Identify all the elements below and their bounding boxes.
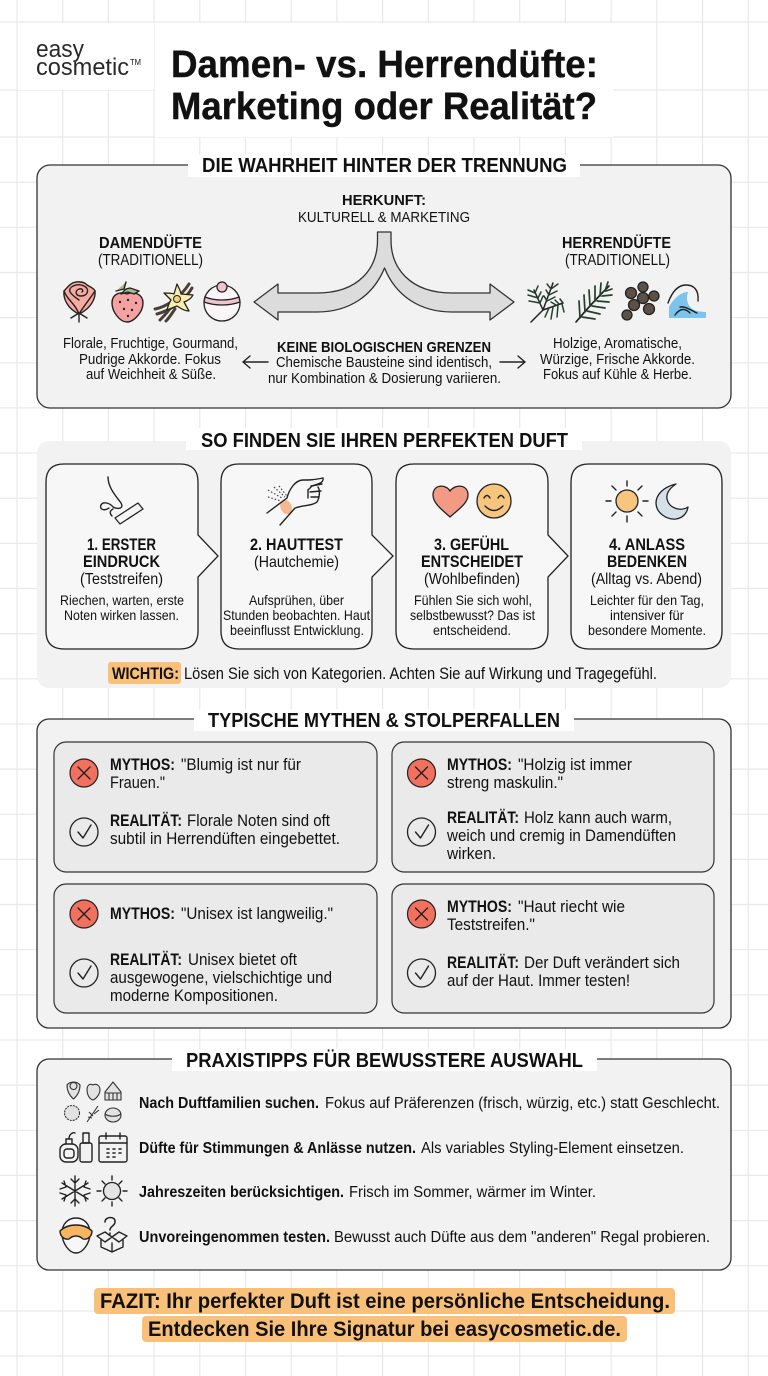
- text: myth 3: ausgewogene, vielschichtige und: [110, 969, 332, 987]
- text: myth 1: REALITÄT:: [110, 812, 182, 830]
- text: step 4: BEDENKEN: [607, 553, 687, 571]
- text: step 2: (Hautchemie): [254, 554, 339, 571]
- text: Damendüfte description: Pudrige Akkorde. Fokus: [79, 351, 221, 368]
- text: step 3: [410, 535, 535, 638]
- panel: Praxistipps: [37, 1049, 731, 1270]
- text: step 4: besondere Momente.: [588, 622, 706, 638]
- heading: Herrendüfte: HERRENDÜFTE: [562, 235, 671, 252]
- arrow: small right: [500, 356, 525, 368]
- icon: check: [70, 959, 98, 987]
- text: myth 1: Florale Noten sind oft: [187, 812, 330, 830]
- icon: bottles and calendar: [60, 1133, 127, 1162]
- text: step 1: (Teststreifen): [80, 571, 163, 588]
- icon: moon: [656, 484, 688, 519]
- text: Herrendüfte description: Holzige, Aromatische,: [553, 335, 682, 352]
- text: myth 2: REALITÄT:: [447, 809, 519, 827]
- text: myth 4: REALITÄT:: [447, 954, 519, 972]
- text: Herrendüfte description: Fokus auf Kühle & Herbe.: [543, 366, 692, 383]
- icon: rosemary sprig: [576, 282, 612, 322]
- text: step 3: (Wohlbefinden): [424, 571, 520, 588]
- text: step 3: 3. GEFÜHL: [434, 535, 509, 554]
- text: myth 3: REALITÄT:: [110, 951, 182, 969]
- text: tip 3: Frisch im Sommer, wärmer im Winter.: [349, 1184, 596, 1201]
- text: myth 2: MYTHOS:: [447, 756, 512, 774]
- text: step 4: (Alltag vs. Abend): [591, 571, 702, 588]
- title: Marketing oder Realität?: [171, 86, 597, 128]
- text: step 1: Noten wirken lassen.: [64, 607, 179, 623]
- heading: die Wahrheit: DIE WAHRHEIT HINTER DER TRENNUNG: [202, 154, 567, 177]
- text: myth 1: subtil in Herrendüften eingebettet.: [110, 830, 340, 848]
- icon: wrist with spray: [267, 478, 323, 525]
- text: tip 3: [139, 1184, 596, 1201]
- text: Damendüfte description: auf Weichheit & Süße.: [86, 366, 216, 383]
- icon: check: [408, 959, 436, 987]
- panel: die Wahrheit hinter der Trennung: [37, 154, 731, 408]
- text: keine biologischen Grenzen: [268, 339, 501, 387]
- logo: easy cosmetic: easy: [36, 36, 84, 63]
- callout: wichtig: WICHTIG:: [112, 665, 179, 683]
- text: keine biologischen Grenzen: nur Kombination & Dosierung variieren.: [268, 370, 501, 387]
- text: keine biologischen Grenzen: Chemische Bausteine sind identisch,: [276, 354, 492, 371]
- text: myth 1: "Blumig ist nur für: [181, 756, 301, 774]
- text: step 2: beeinflusst Entwicklung.: [230, 622, 364, 638]
- icon: snowflake: [60, 1176, 90, 1206]
- icon: sun: [606, 481, 648, 522]
- step 4: [571, 464, 722, 649]
- text: step 1: 1. ERSTER: [87, 536, 156, 554]
- text: step 4: Leichter für den Tag,: [590, 592, 704, 608]
- heading: Herrendüfte: (TRADITIONELL): [565, 252, 670, 269]
- text: myth 4: [447, 898, 680, 990]
- icon: cross: [70, 900, 98, 928]
- text: step 2: 2. HAUTTEST: [250, 536, 343, 554]
- arrow: small left: [243, 356, 268, 368]
- icon: check: [70, 818, 98, 846]
- heading: Damendüfte: [98, 235, 203, 269]
- text: tip 2: Düfte für Stimmungen & Anlässe nutzen.: [139, 1140, 416, 1157]
- title: Damen- vs. Herrendüfte:: [171, 44, 598, 86]
- text: step 3: Fühlen Sie sich wohl,: [414, 592, 532, 608]
- text: myth 3: "Unisex ist langweilig.": [181, 905, 333, 923]
- text: step 4: intensiver für: [610, 607, 684, 623]
- icon: nose and test strip: [101, 477, 143, 524]
- callout: Fazit: FAZIT: Ihr perfekter Duft ist eine persönliche Entscheidung.: [100, 1290, 670, 1313]
- myth card 3: [54, 884, 377, 1013]
- heading: Praxistipps: PRAXISTIPPS FÜR BEWUSSTERE AUSWAHL: [186, 1049, 583, 1072]
- text: keine biologischen Grenzen: KEINE BIOLOGISCHEN GRENZEN: [277, 339, 491, 356]
- text: Herkunft: KULTURELL & MARKETING: [298, 209, 470, 226]
- text: step 2: Stunden beobachten. Haut: [223, 607, 370, 623]
- myth card 1: [54, 742, 377, 872]
- heading: so finden: SO FINDEN SIE IHREN PERFEKTEN DUFT: [201, 429, 568, 452]
- title: [171, 44, 598, 128]
- text: myth 2: wirken.: [446, 845, 496, 863]
- step 2: [221, 464, 393, 649]
- callout: wichtig: [108, 662, 657, 684]
- text: step 3: ENTSCHEIDET: [421, 553, 523, 571]
- icon: rose: [64, 282, 95, 322]
- text: myth 4: "Haut riecht wie: [518, 898, 625, 916]
- icon: scent families: [64, 1082, 121, 1122]
- icon: peppercorns: [622, 282, 659, 320]
- text: Herrendüfte description: [540, 335, 695, 383]
- text: myth 2: "Holzig ist immer: [518, 756, 632, 774]
- icon: sun: [97, 1176, 127, 1206]
- text: step 3: selbstbewusst? Das ist: [410, 607, 535, 623]
- step 1: [46, 464, 218, 649]
- text: tip 4: Bewusst auch Düfte aus dem "anderen" Regal probieren.: [334, 1229, 710, 1246]
- arrow: split into both directions: [254, 232, 514, 320]
- text: step 2: Aufsprühen, über: [249, 592, 344, 608]
- text: tip 2: [139, 1140, 684, 1157]
- text: Herkunft: [298, 192, 470, 226]
- text: myth 4: MYTHOS:: [447, 898, 512, 916]
- panel: typische Mythen und Stolperfallen: [37, 709, 731, 1028]
- callout: Fazit: Entdecken Sie Ihre Signatur bei easycosmetic.de.: [148, 1318, 621, 1341]
- icon: fir sprig: [528, 283, 564, 322]
- text: myth 3: [110, 905, 333, 1005]
- text: myth 4: Teststreifen.": [447, 916, 535, 934]
- icon: check: [408, 818, 436, 846]
- text: myth 1: MYTHOS:: [110, 756, 175, 774]
- text: step 3: entscheidend.: [433, 622, 511, 638]
- text: tip 4: [139, 1229, 710, 1246]
- logo: easy cosmetic: cosmetic: [36, 54, 129, 81]
- myth card 4: [392, 884, 714, 1013]
- heading: Mythen: TYPISCHE MYTHEN & STOLPERFALLEN: [208, 709, 560, 732]
- text: tip 4: Unvoreingenommen testen.: [139, 1229, 330, 1246]
- text: tip 1: [139, 1095, 720, 1112]
- text: step 4: 4. ANLASS: [609, 536, 685, 554]
- icon: mystery box: [97, 1218, 127, 1252]
- panel: so finden Sie Ihren perfekten Duft: [37, 428, 731, 688]
- text: Herkunft: HERKUNFT:: [342, 192, 426, 209]
- text: Damendüfte description: [63, 335, 238, 383]
- myth card 2: [392, 742, 714, 872]
- text: myth 2: Holz kann auch warm,: [524, 809, 672, 827]
- text: Herrendüfte description: Würzige, Frische Akkorde.: [540, 351, 695, 368]
- text: tip 3: Jahreszeiten berücksichtigen.: [139, 1184, 344, 1201]
- icon: cross: [408, 759, 436, 787]
- callout: wichtig: Lösen Sie sich von Kategorien. Achten Sie auf Wirkung und Tragegefühl.: [184, 665, 657, 683]
- text: step 2: [223, 536, 370, 638]
- text: myth 3: moderne Kompositionen.: [110, 987, 278, 1005]
- logo: easy cosmetic: [36, 36, 141, 81]
- text: myth 1: Frauen.": [110, 774, 165, 792]
- text: myth 2: weich und cremig in Damendüften: [446, 827, 676, 845]
- icon: wave: [668, 285, 706, 318]
- icon: strawberry: [112, 282, 143, 322]
- logo: easy cosmetic: TM: [130, 58, 141, 67]
- icon: cross: [408, 900, 436, 928]
- heading: Damendüfte: (TRADITIONELL): [98, 252, 203, 269]
- text: step 1: EINDRUCK: [83, 553, 160, 571]
- heading: Herrendüfte: [562, 235, 671, 269]
- icon: cross: [70, 759, 98, 787]
- text: step 1: Riechen, warten, erste: [60, 592, 184, 608]
- text: myth 4: auf der Haut. Immer testen!: [447, 972, 630, 990]
- text: myth 3: Unisex bietet oft: [188, 951, 297, 969]
- text: step 1: [60, 536, 184, 623]
- text: myth 2: streng maskulin.": [447, 774, 563, 792]
- icon: heart: [433, 486, 468, 517]
- text: myth 2: [446, 756, 676, 863]
- icon: powder bottle: [204, 282, 240, 321]
- text: step 4: [588, 536, 706, 638]
- text: tip 1: Nach Duftfamilien suchen.: [139, 1095, 319, 1112]
- icon: smiley: [477, 484, 511, 518]
- callout: Fazit: [94, 1288, 675, 1342]
- heading: Damendüfte: DAMENDÜFTE: [99, 235, 202, 252]
- text: myth 4: Der Duft verändert sich: [524, 954, 680, 972]
- text: myth 3: MYTHOS:: [110, 905, 175, 923]
- text: myth 1: [110, 756, 340, 848]
- text: Damendüfte description: Florale, Fruchtige, Gourmand,: [63, 335, 238, 352]
- icon: vanilla flower: [155, 284, 193, 321]
- text: tip 2: Als variables Styling-Element einsetzen.: [421, 1140, 684, 1157]
- icon: blindfolded face: [60, 1218, 92, 1253]
- step 3: [396, 464, 568, 649]
- text: tip 1: Fokus auf Präferenzen (frisch, würzig, etc.) statt Geschlecht.: [325, 1095, 720, 1112]
